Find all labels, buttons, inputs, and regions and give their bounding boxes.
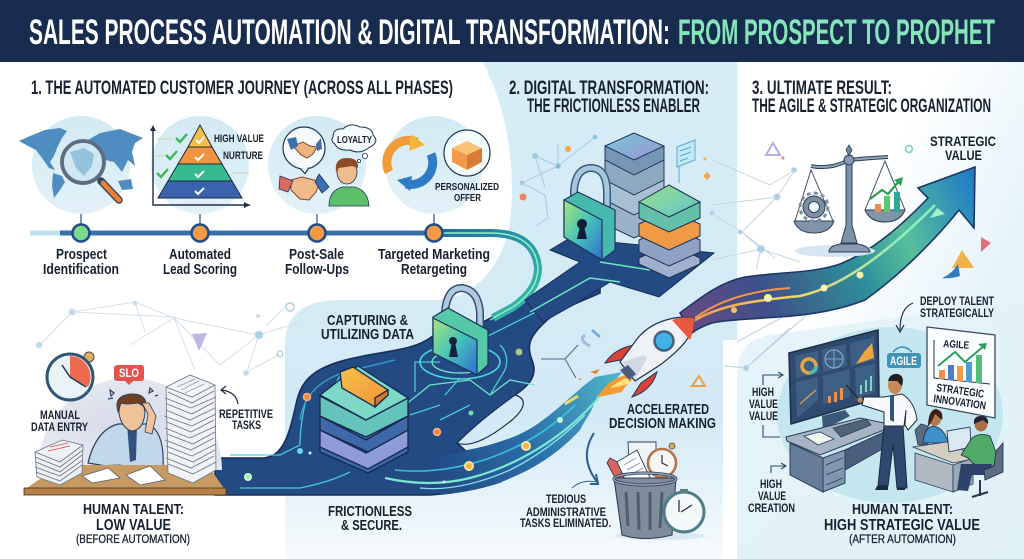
slo badge [114, 365, 144, 385]
label: tedious tasks eliminated: ADMINISTRATIVE [526, 505, 606, 519]
label: accelerated decision making: DECISION MAKING [609, 416, 716, 432]
label: high value value: VALUE [749, 399, 778, 411]
label: high value creation: VALUE [758, 491, 786, 503]
offer badge [444, 130, 490, 176]
thought bubble: loyalty: LOYALTY [337, 135, 372, 146]
icon: magnifier [62, 141, 119, 200]
label: frictionless and secure: & SECURE. [341, 518, 402, 534]
label: nurture: NURTURE [223, 150, 263, 162]
small shapes [766, 143, 780, 155]
bracket arrows [763, 372, 786, 473]
label: frictionless and secure: FRICTIONLESS [328, 504, 412, 520]
step labels: Targeted Marketing [378, 246, 490, 263]
circuit traces on road [230, 275, 612, 489]
label: repetitive tasks: TASKS [232, 420, 261, 432]
arrow to bin [587, 433, 598, 484]
body [620, 317, 694, 381]
icon: lead scoring pyramid [150, 125, 264, 208]
chart label strategic innovation [933, 382, 987, 412]
growth arrow [680, 167, 975, 333]
step circles [32, 116, 483, 214]
step labels: Automated [169, 246, 231, 263]
lower handshake [291, 177, 320, 200]
step labels: Prospect [56, 246, 107, 263]
panel 3 background upper [737, 62, 1024, 352]
label: strategic value: STRATEGIC [930, 133, 996, 149]
offer box [452, 141, 482, 170]
strategy chart board [927, 327, 995, 418]
label: accelerated decision making: ACCELERATED [627, 402, 709, 418]
decorative network icons [520, 135, 711, 226]
stress drops [108, 388, 158, 399]
agile badge [887, 347, 921, 368]
label: tedious tasks eliminated [520, 492, 611, 530]
heading 3 [752, 77, 991, 117]
strategic workplace scene [748, 296, 1003, 515]
agile badge: AGILE [890, 356, 917, 368]
monitor [789, 330, 879, 430]
circuit pad [525, 238, 714, 322]
heading 3: 3. ULTIMATE RESULT: [752, 77, 892, 99]
label: high value value: VALUE [749, 411, 778, 423]
label: deploy talent strategically: STRATEGICALLY [920, 308, 994, 320]
slo badge: SLO [119, 366, 139, 380]
background network lines centre right [710, 160, 800, 270]
label: manual data entry: MANUAL [40, 410, 80, 422]
offer label: PERSONALIZED [435, 181, 499, 193]
step labels: Lead Scoring [163, 261, 237, 278]
colleagues at desk [913, 409, 1003, 497]
folder [340, 367, 388, 407]
decorative triangles near arrow [942, 237, 991, 278]
timeline node: prospect [72, 224, 90, 242]
arrow: deploy talent [896, 303, 913, 332]
glowing nodes on road [245, 294, 582, 484]
presenter [846, 374, 917, 490]
data server stack [320, 366, 408, 473]
chart label strategic innovation: INNOVATION [933, 393, 987, 412]
trash bin [607, 442, 706, 540]
road lower strand to rocket [440, 372, 622, 495]
step labels: Identification [43, 261, 119, 278]
label: deploy talent strategically [920, 296, 994, 320]
label: strategic value [930, 133, 996, 163]
fins [605, 345, 635, 363]
title banner [0, 0, 1024, 62]
heading 2: THE FRICTIONLESS ENABLER [527, 95, 700, 117]
big lock [564, 168, 615, 260]
label: capturing and utilizing data: UTILIZING DATA [321, 327, 414, 343]
background network lines left [36, 301, 300, 376]
step labels: Follow-Ups [285, 261, 349, 278]
label: repetitive tasks: REPETITIVE [219, 409, 273, 421]
panel 3 background lower [737, 300, 1024, 559]
label: human talent high strategic value: (AFTER AUTOMATION) [849, 534, 956, 546]
icon: follow-up handshakes and customer [279, 125, 376, 206]
label: repetitive tasks [219, 409, 273, 432]
label: human talent low value: HUMAN TALENT: [83, 502, 184, 518]
step labels [43, 246, 490, 278]
worried worker [88, 394, 163, 473]
arrow swoosh to text [572, 481, 597, 488]
label: high value creation [748, 479, 795, 515]
heading 1: 1. THE AUTOMATED CUSTOMER JOURNEY (ACROSS ALL PHASES) [31, 77, 453, 99]
step labels: Retargeting [401, 261, 467, 278]
label: manual data entry: DATA ENTRY [31, 422, 88, 434]
label: frictionless and secure [328, 504, 412, 534]
icon: world map with magnifier [19, 128, 143, 200]
stopwatch icon [47, 352, 94, 400]
background network lines panel 3 lower [724, 314, 808, 370]
arrow: repetitive tasks [221, 386, 238, 404]
icon: retargeting cycle and offer [387, 130, 499, 204]
tall paper stack [164, 375, 216, 483]
manual work scene [24, 352, 273, 495]
label: accelerated decision making [609, 402, 716, 432]
heading 2 [509, 77, 709, 117]
bars on pan [875, 204, 881, 212]
gear [800, 193, 828, 221]
chart label agile: AGILE [943, 338, 970, 352]
clock [664, 489, 704, 532]
offer label [435, 181, 499, 204]
teardrop gap in road [457, 395, 523, 444]
label: high value creation: HIGH [760, 479, 782, 491]
panel 2 background: digital transformation [285, 62, 737, 559]
heading 2: 2. DIGITAL TRANSFORMATION: [509, 77, 709, 99]
offer label: OFFER [454, 192, 481, 204]
step labels: Post-Sale [289, 246, 344, 263]
desk [786, 418, 884, 492]
chart label strategic innovation: STRATEGIC [936, 382, 985, 401]
timeline [30, 214, 538, 318]
label: human talent high strategic value: HUMAN TALENT: [852, 502, 953, 518]
label: manual data entry [31, 410, 88, 434]
label: human talent low value [76, 502, 190, 546]
label: capturing and utilizing data: CAPTURING & [327, 313, 408, 329]
enabler pad and servers [520, 133, 714, 322]
label: human talent high strategic value [824, 502, 980, 546]
main data road [215, 267, 600, 495]
document flag [677, 140, 695, 183]
label: human talent low value: (BEFORE AUTOMATION) [76, 534, 190, 546]
small paper stack [35, 440, 83, 485]
timeline node: lead scoring [192, 224, 208, 242]
label: high value: HIGH VALUE [214, 133, 264, 145]
label: tedious tasks eliminated: TASKS ELIMINATED. [520, 516, 611, 530]
label: human talent low value: LOW VALUE [96, 517, 171, 534]
timeline node: retargeting [426, 224, 442, 242]
rocket [578, 317, 694, 397]
road lock [420, 288, 500, 379]
flame trail [597, 375, 637, 397]
small server stack [639, 185, 700, 278]
teal connector tube to lock [440, 233, 538, 318]
label: strategic value: VALUE [945, 147, 982, 163]
desk [24, 465, 226, 495]
label: capturing and utilizing data [321, 313, 414, 343]
timeline node: follow-ups [308, 224, 326, 242]
label: human talent high strategic value: HIGH STRATEGIC VALUE [824, 517, 980, 534]
customer figure [329, 187, 369, 206]
small floating icons [541, 330, 705, 386]
label: tedious tasks eliminated: TEDIOUS [546, 492, 586, 506]
scales icon [766, 143, 912, 257]
label: high value creation: CREATION [748, 503, 795, 515]
label: high value value [749, 387, 778, 423]
label: high value value: HIGH [752, 387, 774, 399]
label: deploy talent strategically: DEPLOY TALENT [920, 296, 994, 308]
tall server stack [605, 133, 664, 238]
